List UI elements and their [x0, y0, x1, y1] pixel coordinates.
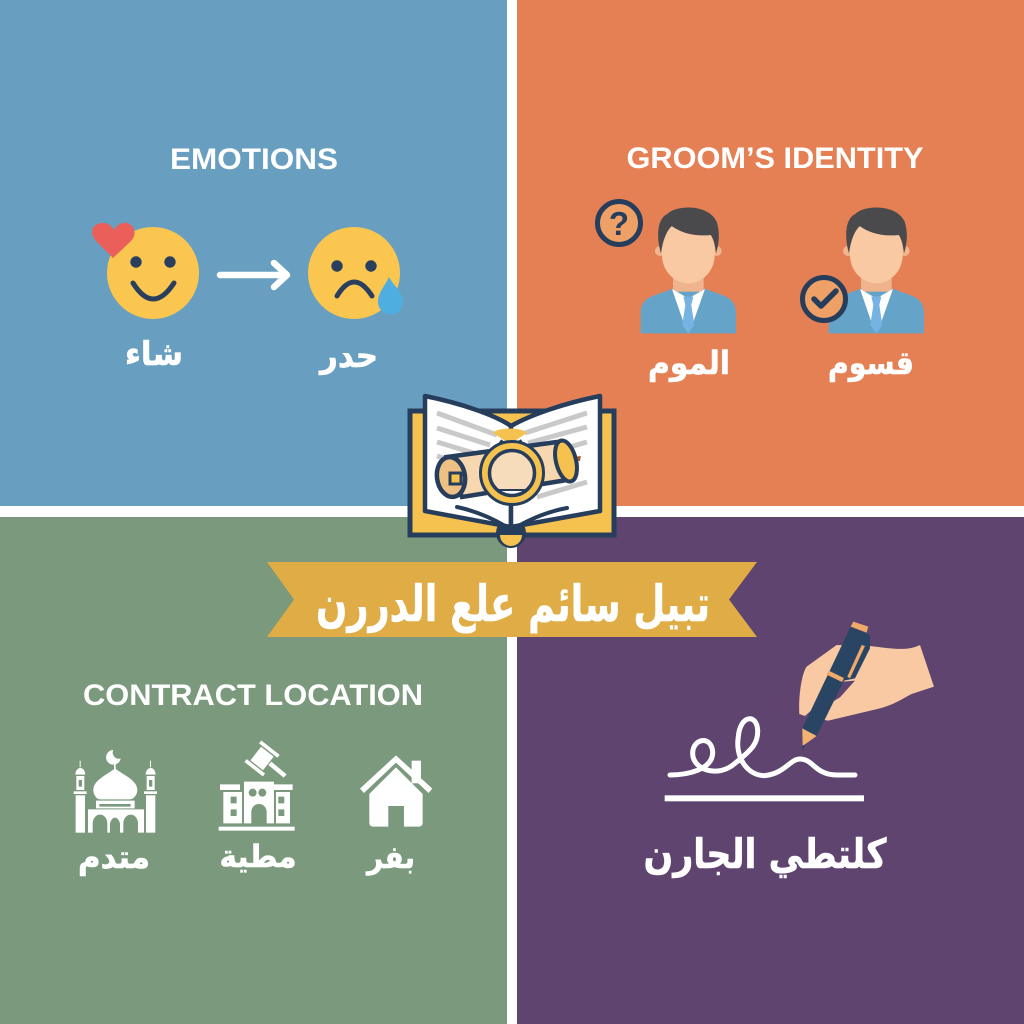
banner title: تبيل سائم علع الدررن	[316, 575, 710, 634]
page text lines	[437, 413, 587, 497]
arrow: happy to sad	[220, 263, 287, 287]
label: home: بفر	[365, 840, 415, 876]
icon: check badge	[802, 278, 846, 320]
heading: contract location: CONTRACT LOCATION	[83, 679, 423, 712]
heading: emotions: EMOTIONS	[170, 143, 338, 176]
label: groom known: قسوم	[828, 344, 914, 382]
label: mosque: متدم	[78, 838, 150, 876]
icon: mosque	[74, 750, 157, 833]
heading: groom's identity: GROOM’S IDENTITY	[626, 142, 924, 175]
icon: question badge: ?	[609, 205, 629, 242]
icon: unknown groom	[641, 207, 736, 333]
icon: question badge	[598, 202, 640, 244]
panel: emotions background	[0, 0, 507, 506]
panel: signature background	[517, 517, 1024, 1024]
label: signature: كلتطي الجارن	[644, 830, 887, 878]
icon: happy face with heart	[92, 223, 199, 319]
ring	[493, 428, 527, 444]
label: court: مطية	[220, 839, 296, 875]
icon: verified groom	[829, 207, 924, 333]
banner	[267, 562, 757, 637]
scroll	[447, 442, 571, 497]
panel: contract location background	[0, 517, 507, 1024]
label: happy: شاء	[125, 334, 183, 373]
label: groom unknown: الموم	[648, 344, 730, 382]
icon: house	[360, 755, 432, 827]
book cover	[410, 411, 614, 535]
panel: groom's identity background	[517, 0, 1024, 506]
icon: open book with scroll and ring	[410, 396, 614, 548]
left and right pages	[425, 396, 511, 527]
label: sad: حدر	[318, 336, 378, 375]
icon: hand writing with pen	[799, 622, 934, 752]
signature line	[665, 719, 864, 801]
icon: courthouse with gavel	[219, 741, 295, 831]
icon: sad face with tear	[308, 227, 403, 319]
